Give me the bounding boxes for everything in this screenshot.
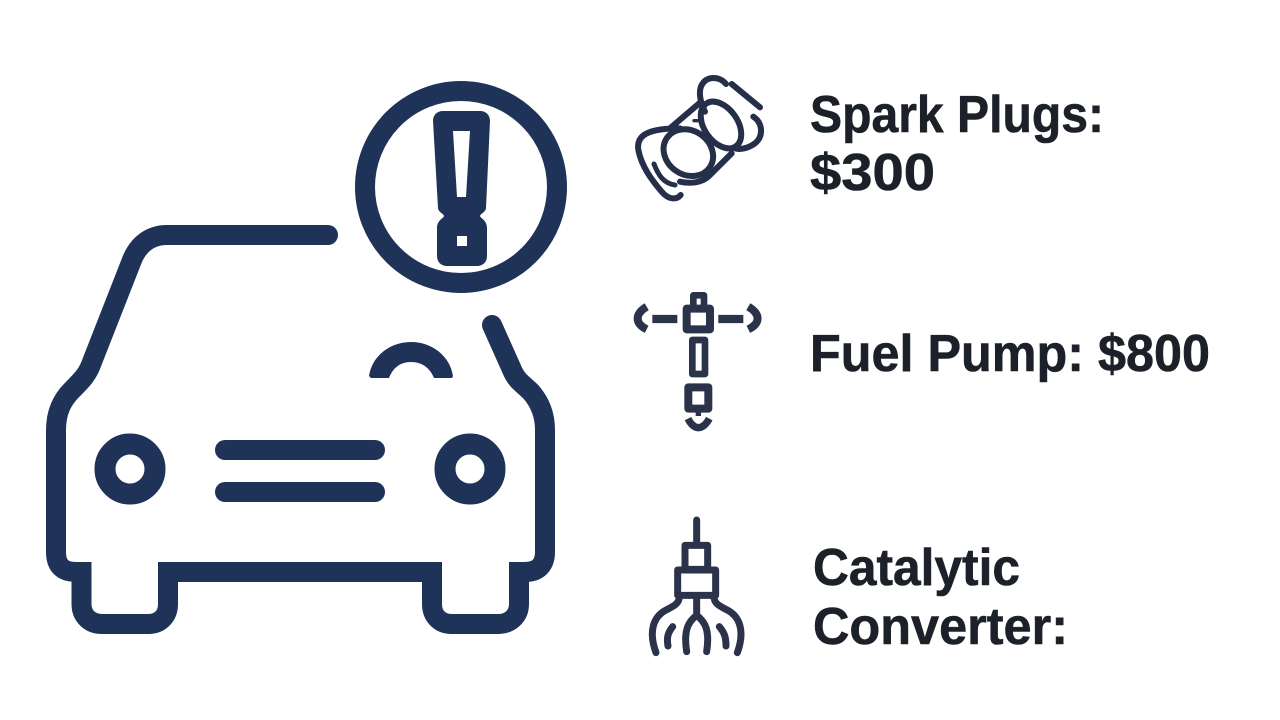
icon: car front view	[56, 235, 545, 624]
text: catalytic converter: Converter:	[813, 598, 1068, 656]
icon: catalytic converter	[652, 520, 741, 653]
icon: fuel pump	[638, 295, 758, 428]
text: catalytic converter: Catalytic	[813, 539, 1020, 597]
text: spark plugs cost: $300	[810, 144, 935, 202]
text: spark plugs cost	[810, 86, 1104, 202]
text: catalytic converter	[813, 539, 1068, 656]
icon: spark plugs	[638, 78, 761, 198]
icon: alert circle with exclamation mark	[365, 91, 557, 283]
text: fuel pump cost: Fuel Pump: $800	[810, 325, 1210, 383]
text: spark plugs cost: Spark Plugs:	[810, 86, 1104, 144]
